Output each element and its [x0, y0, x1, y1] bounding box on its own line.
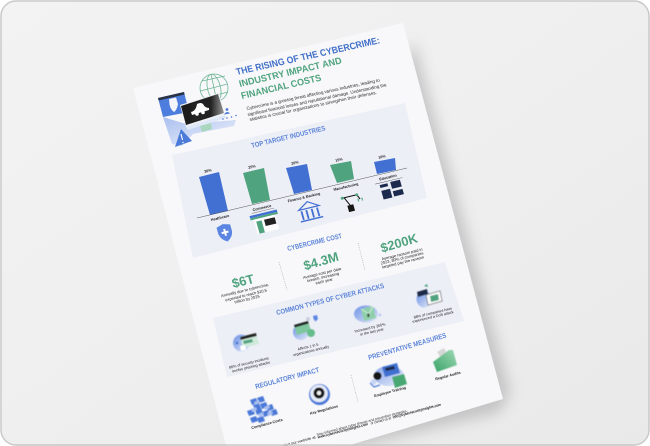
bar chart: Manufacturing	[333, 182, 359, 192]
bar chart: Healthcare	[210, 214, 230, 222]
paper	[133, 23, 503, 445]
icon: DoS	[416, 284, 442, 308]
stat: $6T: $6T	[230, 271, 256, 291]
section: preventative measures	[368, 332, 461, 398]
footer text: or contact us at	[370, 416, 392, 425]
captions: in the last year	[360, 327, 385, 337]
labels	[374, 371, 461, 398]
heading: REGULATORY IMPACT	[255, 367, 321, 391]
stat: $200K: targeted pay the ransom	[381, 254, 425, 269]
footer text: www.cybersecurityinsights.com	[316, 422, 369, 440]
bar chart: 30%	[204, 168, 213, 174]
icon: regular audits folder	[433, 348, 457, 372]
stat: $4.3M: Average cost per data	[302, 266, 342, 280]
stat: $4.3M	[302, 249, 342, 285]
paper shadow	[330, 40, 510, 446]
icon: person and dots	[222, 108, 237, 120]
icon: laptop screen with spy	[180, 93, 226, 132]
bar chart	[197, 154, 407, 222]
section: cybercrime cost	[220, 230, 425, 304]
captions: experienced a DoS attack	[412, 310, 454, 324]
heading: CYBERCRIME COST	[287, 233, 344, 253]
stat: $6T: expected to reach $10.5	[225, 287, 268, 302]
captions: Increased by 300%	[354, 322, 387, 334]
captions	[229, 306, 454, 373]
bar chart: Finance & Banking	[287, 192, 321, 203]
footer text: Stay informed about cyber threats and prevention strategies.	[316, 409, 408, 437]
stat: $200K: Average ransom paid in	[381, 247, 423, 261]
icon: malware	[354, 306, 381, 322]
bottom edge strip	[16, 444, 634, 446]
heading: COMMON TYPES OF CYBER ATTACKS	[276, 283, 385, 317]
stat: $6T: trillion by 2025	[234, 293, 261, 304]
icon: healthcare shield	[216, 222, 234, 243]
stat: $200K: $200K	[379, 230, 420, 256]
footer text: info@cybersecurityinsights.com	[392, 403, 442, 419]
bar chart: Education	[379, 173, 398, 182]
stat: $4.3M: $4.3M	[302, 249, 340, 273]
icon: key regulations	[309, 384, 330, 405]
bar chart: 20%	[291, 160, 300, 166]
labels	[251, 404, 338, 430]
icon: ransomware	[293, 315, 318, 340]
icon: education panels	[375, 178, 407, 200]
labels: Employee Training	[374, 386, 406, 398]
icon: blue window with shield	[158, 92, 189, 117]
captions: Affects 1 in 5	[297, 343, 319, 351]
stat: $6T: Annually due to cybercrime,	[220, 282, 270, 298]
icon: finance bank	[296, 199, 323, 223]
icon: warning triangle	[175, 129, 192, 147]
heading: PREVENTATIVE MEASURES	[368, 332, 448, 362]
stat: $4.3M: each year	[315, 276, 334, 285]
bar chart: 10%	[378, 154, 387, 160]
captions: involve phishing attacks	[232, 360, 271, 373]
stat: $200K: 2023, 80% of companies	[380, 250, 424, 266]
intro text: Cybercrime is a growing threat affecting various industries, leading to	[246, 77, 381, 111]
stat: $200K	[379, 230, 425, 269]
labels: Key Regulations	[310, 404, 338, 416]
bar chart: 25%	[248, 164, 257, 170]
title: THE RISING OF THE CYBERCRIME:	[235, 35, 381, 78]
captions: organizations annually	[293, 345, 330, 357]
panel: top target industries	[172, 103, 427, 258]
captions: 88% of companies have	[413, 306, 453, 320]
hero illustration	[158, 73, 237, 147]
infographic sheet	[133, 23, 503, 446]
footer text	[282, 403, 442, 446]
heading: TOP TARGET INDUSTRIES	[251, 125, 327, 150]
icon: manufacturing robot arm	[340, 192, 365, 213]
captions: 86% of security incidents	[229, 356, 270, 370]
labels: Regular Audits	[435, 371, 461, 381]
title	[235, 35, 381, 102]
panel: common types of cyber attacks	[213, 262, 464, 377]
stat: $6T	[220, 271, 270, 304]
icon: compliance blocks	[247, 396, 278, 423]
icon: base swoosh	[163, 117, 236, 146]
bar chart: Commerce	[252, 204, 272, 212]
bar chart: 15%	[335, 157, 344, 163]
icon: globe	[200, 73, 228, 103]
icon: employee training	[370, 363, 407, 388]
intro text: statistics is crucial for organizations to strengthen their defenses.	[249, 90, 377, 122]
intro text: significant financial losses and reputational damage. Understanding the	[247, 82, 388, 117]
icon: phishing	[233, 333, 259, 352]
stat: $4.3M: breach, increasing	[306, 271, 340, 283]
title: INDUSTRY IMPACT AND	[238, 56, 343, 90]
section: regulatory impact	[247, 367, 338, 430]
labels: Compliance Costs	[251, 418, 283, 430]
title: FINANCIAL COSTS	[240, 73, 323, 102]
icon: commerce store	[249, 208, 282, 235]
